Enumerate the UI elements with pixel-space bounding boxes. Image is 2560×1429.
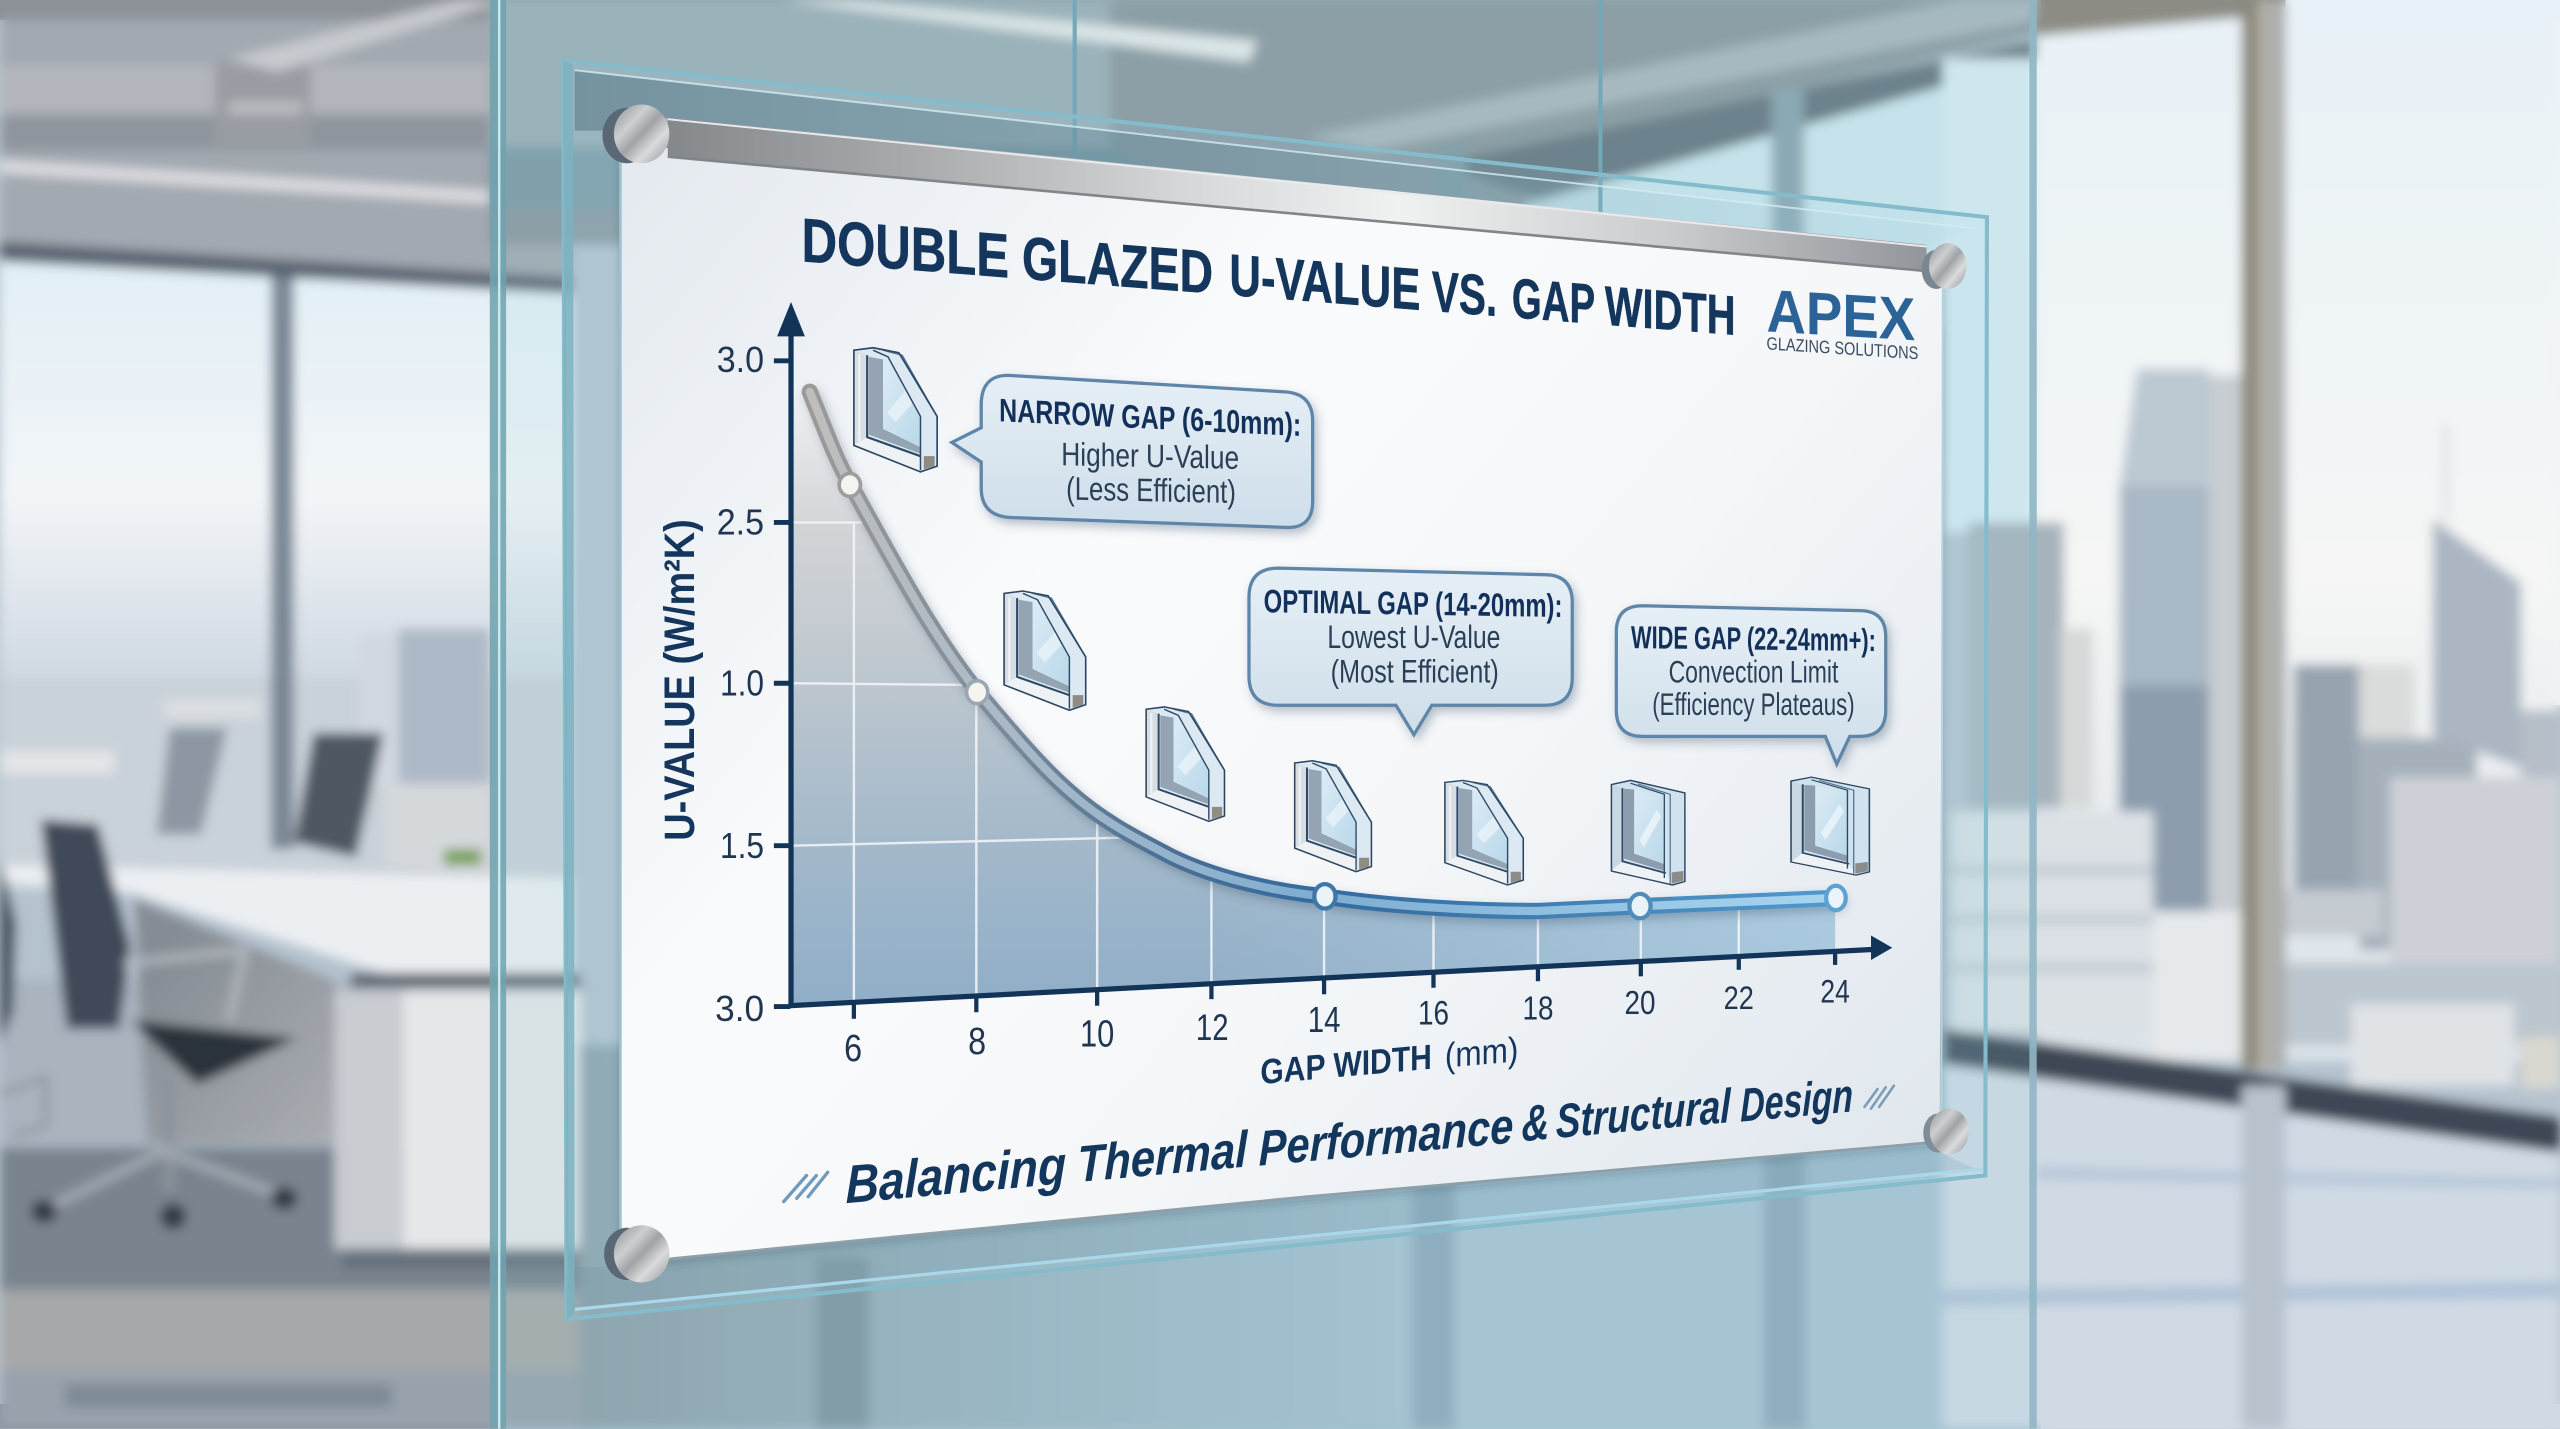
grid lines [792, 522, 1739, 1002]
callout: wide gap [1616, 606, 1886, 764]
window icon 20mm [1611, 780, 1685, 885]
title: U-VALUE [1229, 243, 1420, 323]
glass bottom band below plate [575, 1146, 1976, 1311]
window icon 6mm [854, 348, 937, 472]
floor left [0, 980, 588, 1429]
left monitors [157, 728, 490, 873]
x axis tick labels: 14 [1308, 999, 1340, 1040]
x axis tick labels: 16 [1418, 994, 1449, 1032]
callout: narrow gap: Higher U-Value [1061, 435, 1239, 476]
U-value curve [810, 392, 1835, 911]
tagline: Design [1740, 1069, 1853, 1133]
x axis tick labels: 12 [1196, 1007, 1229, 1048]
right sill [1943, 1029, 2560, 1153]
y axis tick labels: 1.5 [720, 825, 764, 866]
tagline: Balancing [846, 1135, 1066, 1215]
chart: U-value versus gap width [656, 302, 1892, 1092]
title: WIDTH [1605, 275, 1736, 347]
x axis tick labels: 10 [1080, 1013, 1114, 1055]
glass partition right edge [2029, 0, 2037, 1429]
x axis tick labels: 8 [968, 1020, 986, 1062]
left chair [0, 820, 297, 1229]
plate lower edge [669, 1143, 1927, 1259]
y axis tick labels: 2.5 [717, 502, 764, 543]
area lighter tint [1208, 872, 1835, 984]
title: GAP [1512, 266, 1595, 336]
glass outline [563, 60, 1987, 1319]
area under curve [790, 392, 1835, 1006]
tagline [846, 1069, 1853, 1215]
logo: Apex Glazing Solutions: APEX [1767, 276, 1915, 353]
centre ceiling seen through glass [490, 0, 2041, 327]
left mullion [271, 253, 294, 849]
y axis tick labels: 3.0 [717, 339, 764, 380]
plate left edge line [619, 157, 621, 1260]
standoff top left [602, 104, 669, 163]
left desk and cabinet [0, 865, 583, 1269]
y axis tick labels: 3.0 [715, 988, 764, 1029]
plate right edge line [1941, 271, 1943, 1141]
title [802, 206, 1736, 347]
right buildings [1951, 369, 2560, 1089]
glass joint right top [1598, 0, 1602, 229]
x axis with arrow [789, 936, 1892, 1019]
x axis tick labels: 18 [1522, 991, 1553, 1028]
centre floor [580, 1045, 2049, 1429]
standoff top right [1922, 243, 1967, 289]
right strip sky through glass [1943, 59, 2041, 532]
glass outer top highlight [575, 70, 1976, 229]
metal rail [668, 118, 1927, 271]
glass backing plate [563, 60, 1987, 1319]
glass joint left top [1073, 0, 1077, 183]
right floor [1943, 1064, 2560, 1429]
left ceiling [0, 0, 571, 294]
window icon 14mm [1295, 761, 1371, 872]
callout: narrow gap [952, 375, 1313, 527]
callout: wide gap: (Efficiency Plateaus) [1652, 686, 1855, 722]
title: GLAZED [1022, 224, 1213, 307]
y axis tick labels: 1.0 [720, 663, 764, 704]
tagline: Thermal [1078, 1120, 1249, 1193]
slashes left of tagline [784, 1172, 828, 1202]
title: VS. [1432, 260, 1497, 329]
glass partition tint [490, 0, 2036, 1429]
x axis tick labels: 24 [1820, 972, 1850, 1009]
right mullion [2242, 0, 2286, 1069]
callout: narrow gap: NARROW GAP (6-10mm): [999, 391, 1301, 443]
x axis title: GAP WIDTH [1260, 1038, 1432, 1092]
tagline: Performance [1259, 1098, 1513, 1177]
window icon 10mm [1146, 707, 1224, 821]
glass partition left highlight [498, 0, 500, 1429]
printed white plate [620, 144, 1943, 1264]
x axis title: (mm) [1445, 1030, 1518, 1076]
callout: optimal gap [1249, 568, 1572, 735]
glass partition left edge [490, 0, 506, 1429]
x axis tick labels [844, 972, 1850, 1069]
x axis tick labels: 22 [1724, 979, 1754, 1016]
slashes right of tagline [1864, 1086, 1894, 1109]
window icon 17mm [1445, 780, 1523, 885]
y axis with arrow [774, 302, 805, 1007]
callout: optimal gap: Lowest U-Value [1327, 618, 1500, 655]
title: DOUBLE [802, 206, 1009, 292]
callout: optimal gap: (Most Efficient) [1331, 652, 1499, 689]
x axis tick labels: 6 [844, 1027, 862, 1069]
callout: wide gap: Convection Limit [1669, 653, 1838, 689]
data points [839, 473, 1846, 918]
left window sky [0, 229, 571, 702]
left distant building [359, 629, 490, 792]
glass top band above rail [575, 70, 1976, 245]
right window sky [2036, 0, 2560, 1061]
logo: Apex Glazing Solutions: GLAZING SOLUTIONS [1767, 333, 1918, 363]
window icon 8mm [1004, 591, 1086, 710]
sign panel [563, 60, 1987, 1319]
standoff bottom right [1923, 1109, 1969, 1154]
callout: optimal gap: OPTIMAL GAP (14-20mm): [1264, 582, 1562, 624]
y axis tick labels [715, 339, 764, 1029]
y axis title: U-VALUE (W/m²K) [656, 519, 703, 841]
tagline: Structural [1556, 1079, 1732, 1149]
tagline: & [1522, 1093, 1549, 1152]
callout: wide gap: WIDE GAP (22-24mm+): [1631, 619, 1876, 658]
x axis tick labels: 20 [1624, 985, 1656, 1022]
standoff bottom left [604, 1225, 669, 1282]
callout: narrow gap: (Less Efficient) [1066, 470, 1236, 510]
glass bottom bright edge [575, 1169, 1982, 1309]
glass left edge [563, 60, 575, 1319]
window icon 24mm [1791, 777, 1869, 875]
